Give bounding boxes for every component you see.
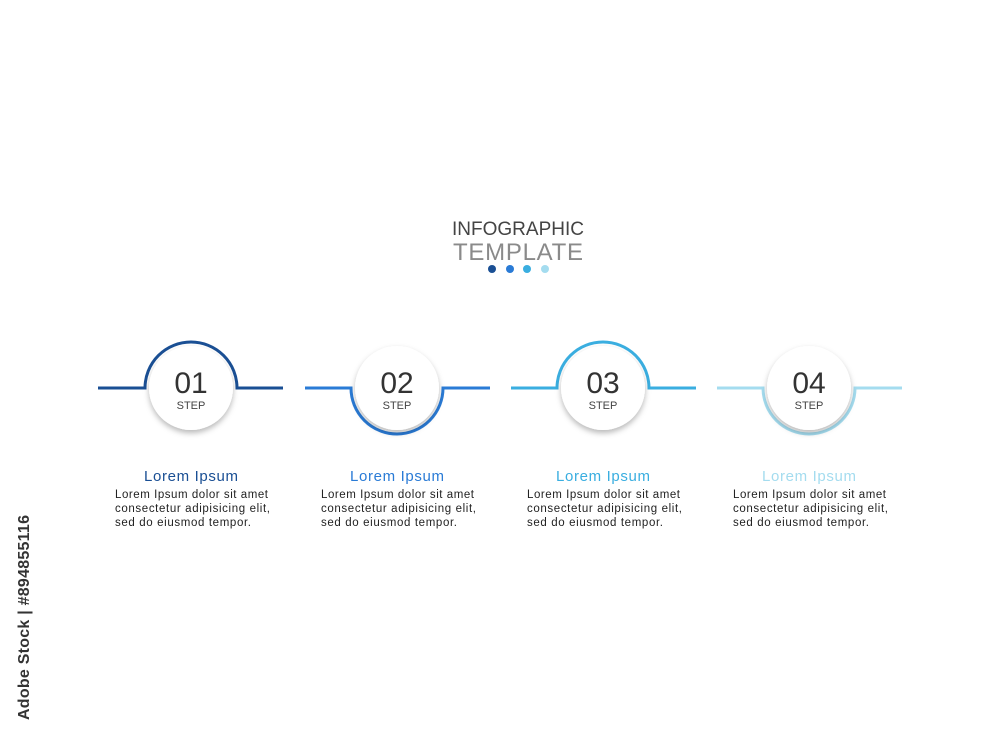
step 4: STEP [795,400,823,412]
step 3: consectetur adipisicing elit, [527,503,682,515]
step 4: Lorem Ipsum [762,468,856,485]
title [452,219,584,273]
step 4: 04 [792,367,826,400]
step 1: STEP [177,400,205,412]
step 4: Lorem Ipsum dolor sit amet [733,489,887,501]
step 3: Lorem Ipsum [556,468,650,485]
watermark text: Adobe Stock | #894855116 [16,515,33,720]
step 2: Lorem Ipsum [350,468,444,485]
title: INFOGRAPHIC [452,219,584,240]
step 1: sed do eiusmod tempor. [115,517,251,529]
step 2: 02 [380,367,414,400]
step 2: consectetur adipisicing elit, [321,503,476,515]
step 3: sed do eiusmod tempor. [527,517,663,529]
step 4: consectetur adipisicing elit, [733,503,888,515]
step 2: sed do eiusmod tempor. [321,517,457,529]
step 1: Lorem Ipsum [144,468,238,485]
step 1: 01 [174,367,208,400]
step 2: STEP [383,400,411,412]
step 4 [717,346,902,529]
step 4: sed do eiusmod tempor. [733,517,869,529]
step 1: consectetur adipisicing elit, [115,503,270,515]
step 3: Lorem Ipsum dolor sit amet [527,489,681,501]
title: TEMPLATE [453,239,583,266]
step 1: Lorem Ipsum dolor sit amet [115,489,269,501]
step 1 [98,342,283,529]
step 2: Lorem Ipsum dolor sit amet [321,489,475,501]
step 3 [511,342,696,529]
step 3: STEP [589,400,617,412]
step 3: 03 [586,367,620,400]
step 2 [305,346,490,529]
